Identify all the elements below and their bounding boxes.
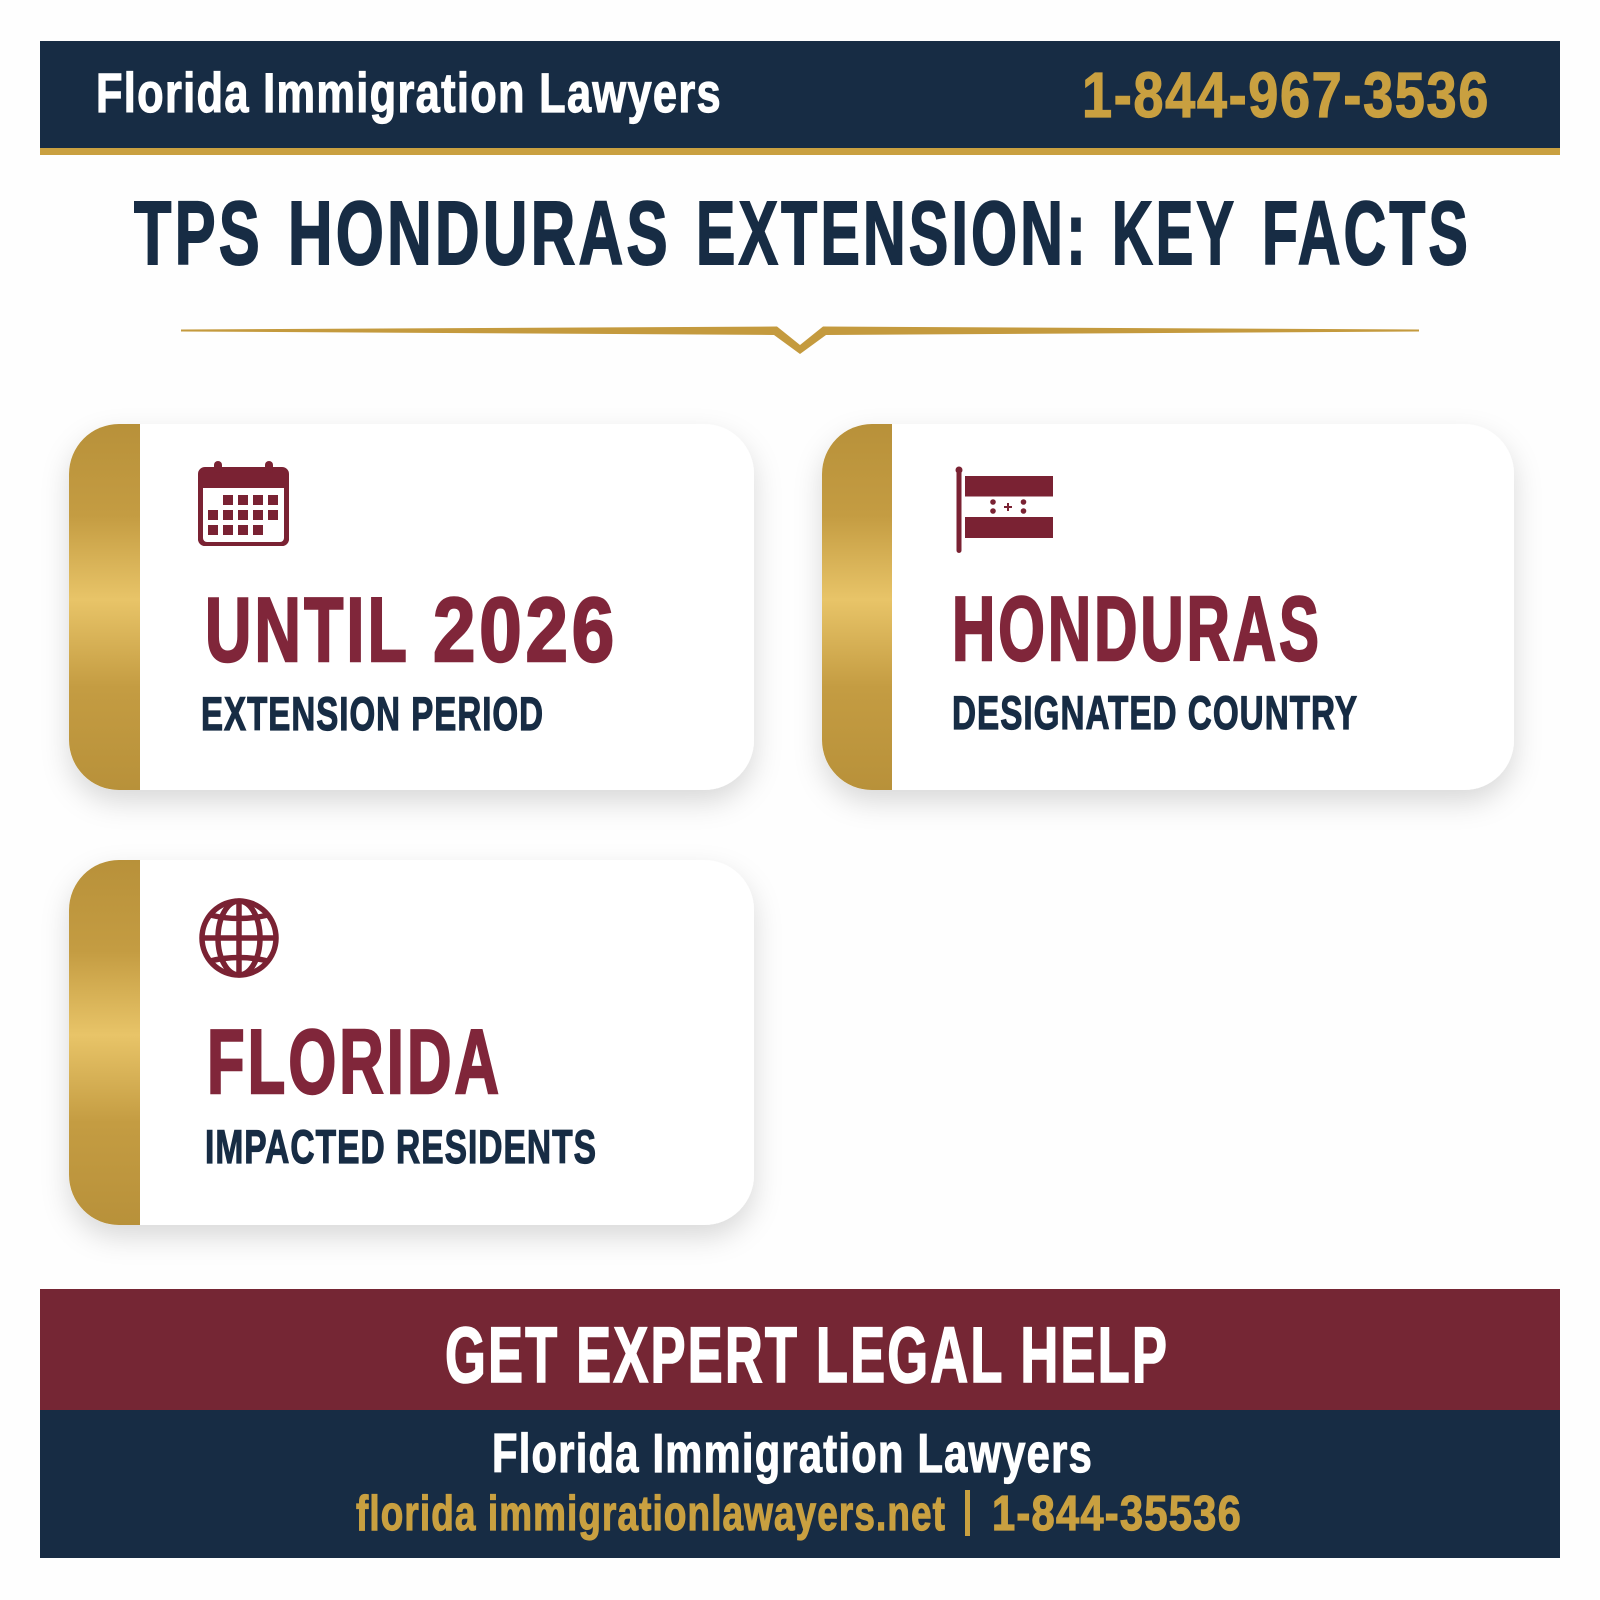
stat: florida: FLORIDA	[207, 1012, 502, 1113]
title: FACTS	[1262, 184, 1471, 284]
footer separator	[965, 1490, 970, 1536]
footer website: florida immigrationlawayers.net	[356, 1487, 946, 1541]
stat: honduras: HONDURAS	[952, 579, 1322, 680]
footer firm name: Florida Immigration Lawyers	[492, 1422, 1093, 1484]
footer phone number: 1-844-35536	[992, 1487, 1242, 1541]
header firm name: Florida Immigration Lawyers	[96, 61, 722, 124]
header bar	[40, 41, 1560, 155]
panel: impacted residents	[69, 860, 754, 1225]
title	[134, 184, 1471, 284]
stat: until 2026: UNTIL	[205, 580, 410, 681]
label: impacted residents: IMPACTED RESIDENTS	[205, 1120, 597, 1173]
label: designated country: DESIGNATED COUNTRY	[952, 686, 1358, 739]
footer call to action band	[40, 1289, 1560, 1410]
title: KEY	[1112, 184, 1237, 284]
title: EXTENSION:	[696, 184, 1089, 284]
icon: honduras flag	[956, 466, 1053, 553]
title: HONDURAS	[288, 184, 671, 284]
header phone number: 1-844-967-3536	[1082, 59, 1490, 131]
icon: calendar	[198, 461, 289, 546]
call to action heading: GET EXPERT LEGAL HELP	[445, 1310, 1169, 1399]
footer contact band	[40, 1410, 1560, 1558]
panel: extension period	[69, 424, 754, 790]
title divider with chevron	[181, 326, 1419, 354]
label: extension period: EXTENSION PERIOD	[201, 687, 544, 740]
title: TPS	[134, 184, 263, 284]
panel: designated country	[822, 424, 1514, 790]
icon: globe	[201, 900, 277, 976]
stat: until 2026: 2026	[433, 580, 618, 681]
